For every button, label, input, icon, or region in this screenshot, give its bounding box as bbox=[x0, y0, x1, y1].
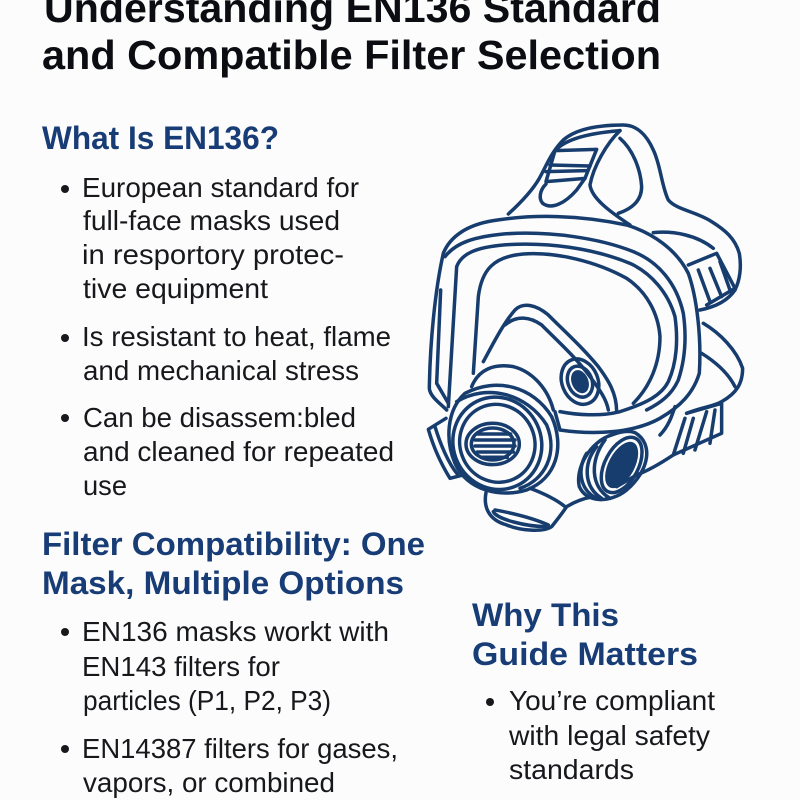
bullet: European standard: in resportory protec- bbox=[82, 239, 344, 270]
nose cup bbox=[472, 305, 617, 412]
bullet: European standard bbox=[61, 172, 359, 304]
panel: filter compatibility bullet list bbox=[61, 616, 398, 798]
lens frame bbox=[429, 216, 700, 433]
heading: Why This Guide Matters bbox=[472, 597, 698, 672]
bullet: European standard: tive equipment bbox=[83, 273, 268, 304]
bullet: disassembly: use bbox=[83, 470, 127, 501]
panel: why this guide matters bullet: You’re compliant bbox=[509, 685, 715, 716]
title: and Compatible Filter Selection bbox=[42, 32, 661, 78]
bullet: European standard: European standard for bbox=[82, 172, 359, 203]
panel: why this guide matters bullet: with legal safety bbox=[508, 720, 710, 751]
panel: why this guide matters bullet: standards bbox=[509, 754, 634, 785]
bullet: EN14387 filters: EN14387 filters for gases, bbox=[82, 733, 398, 764]
lower strap bbox=[637, 323, 743, 475]
heading: Filter Compatibility: Mask, Multiple Options bbox=[42, 565, 404, 601]
icon: full-face respirator mask bbox=[428, 125, 743, 530]
bullet: European standard: full-face masks used bbox=[83, 205, 340, 236]
bullet: disassembly: and cleaned for repeated bbox=[83, 436, 394, 467]
bullet: disassembly bbox=[61, 402, 394, 501]
side exhale valve bbox=[579, 431, 650, 500]
title bbox=[42, 0, 661, 78]
heading: Why This Guide Matters: Guide Matters bbox=[472, 636, 698, 672]
bullet: EN143 filters: EN143 filters for bbox=[82, 651, 280, 682]
bullet: EN143 filters: EN136 masks workt with bbox=[82, 616, 389, 647]
heading: Filter Compatibility: Filter Compatibility: One bbox=[42, 526, 425, 562]
head strap top bbox=[508, 125, 740, 310]
panel: why this guide matters bullet bbox=[486, 685, 715, 785]
bullet: disassembly: Can be disassem:bled bbox=[83, 402, 356, 433]
bullet: heat resistance bbox=[61, 321, 391, 386]
chin piece bbox=[485, 412, 637, 530]
heading: Filter Compatibility bbox=[42, 526, 425, 601]
bullet: heat resistance: and mechanical stress bbox=[83, 355, 359, 386]
bullet: EN143 filters: particles (P1, P2, P3) bbox=[83, 685, 331, 716]
bullet: heat resistance: Is resistant to heat, flame bbox=[82, 321, 391, 352]
panel: What Is EN136 bullet list bbox=[61, 172, 394, 501]
heading: Why This Guide Matters: Why This bbox=[472, 597, 619, 633]
bullet: EN14387 filters: vapors, or combined bbox=[83, 767, 335, 798]
bullet: EN143 filters bbox=[61, 616, 389, 716]
heading: What Is EN136?: What Is EN136? bbox=[42, 120, 279, 156]
front filter cartridge bbox=[428, 382, 558, 504]
bullet: EN14387 filters bbox=[61, 733, 398, 798]
